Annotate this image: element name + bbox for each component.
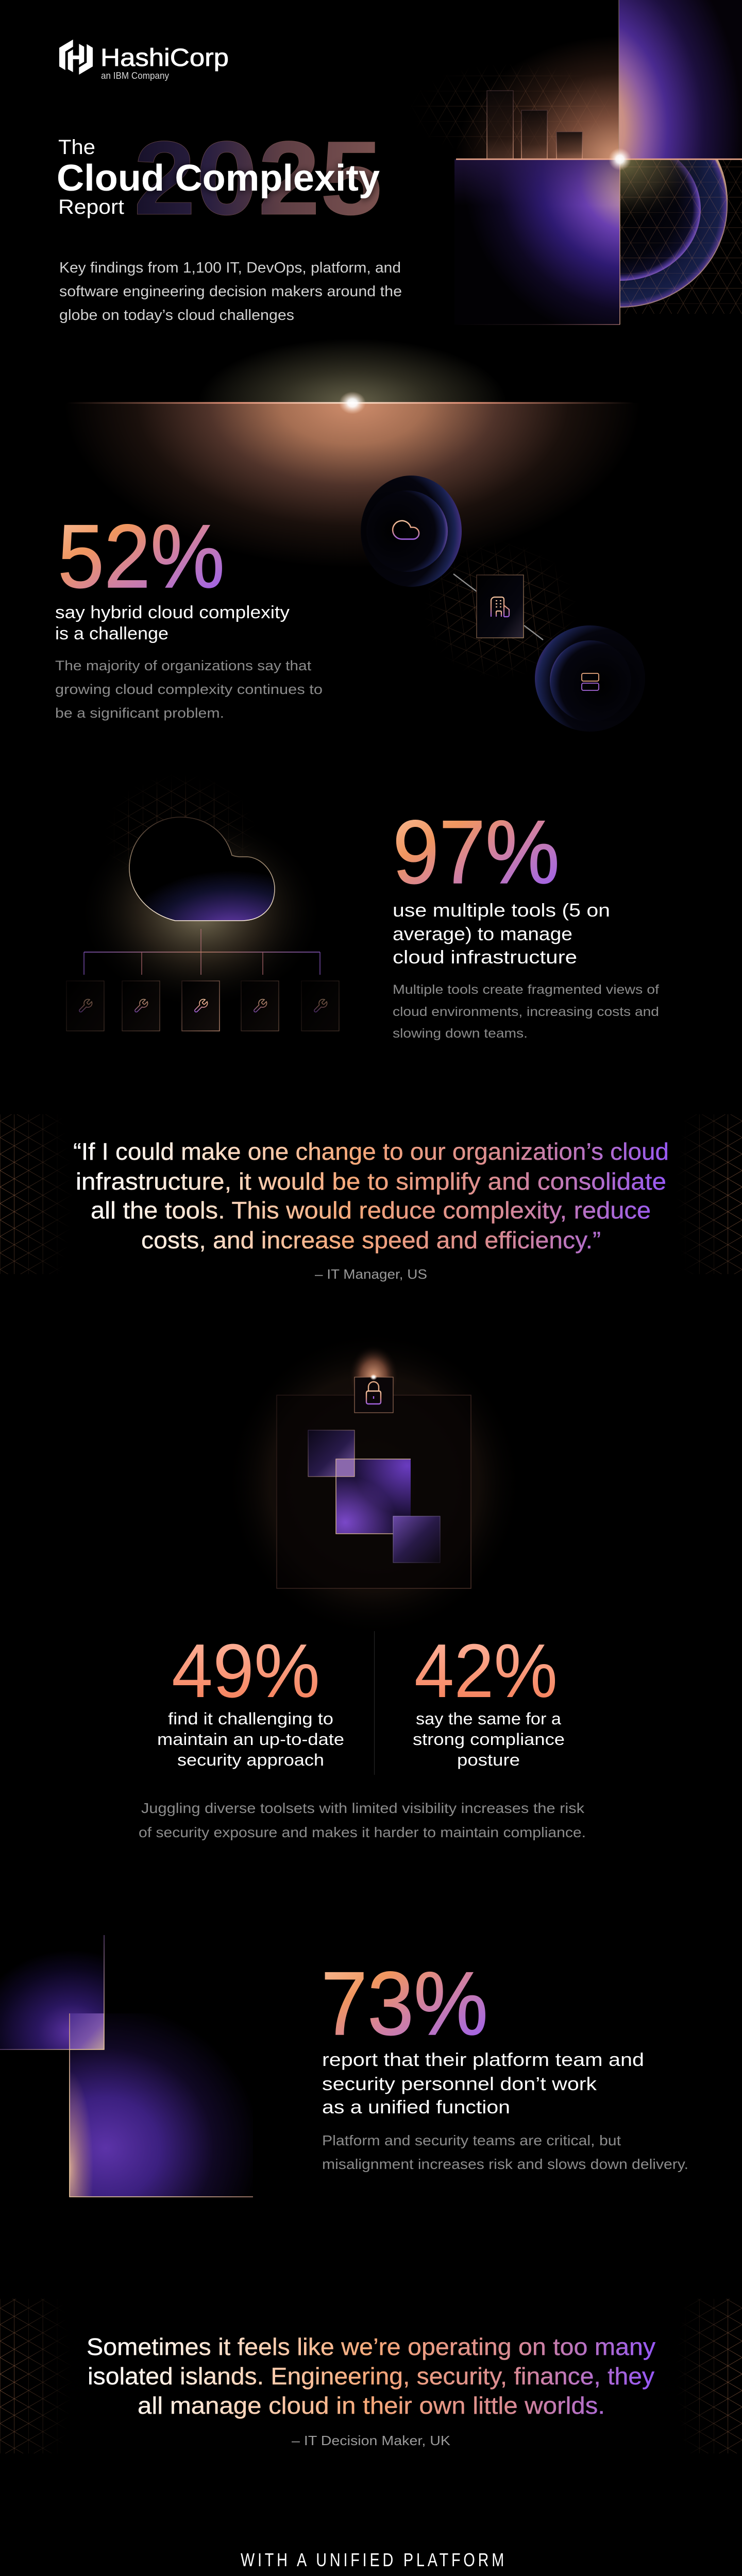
73 percent description: misalignment increases risk and slows down delivery. [322,2156,688,2172]
97 percent stat: 97% [393,802,560,903]
quote one [0,1114,742,1282]
hero intro text [59,260,402,324]
big cloud [129,817,275,921]
stat divider [374,1631,375,1775]
52 percent label: say hybrid cloud complexity [55,603,290,622]
hero graphic [407,0,742,325]
grid over arcs [620,159,742,314]
49 percent label [157,1709,344,1769]
hybrid diagram [361,476,645,732]
server node inner ring [550,640,631,722]
top panel edge line [618,0,619,159]
horizon star [339,392,366,414]
cloud node [361,476,462,587]
quote attribution: – IT Manager, US [315,1266,427,1282]
icon: building [491,597,509,617]
hero section [57,0,742,325]
49 percent label: security approach [177,1751,324,1769]
bar chart bars [487,91,582,159]
97 percent label: cloud infrastructure [393,946,577,968]
73 percent label: report that their platform team and [322,2049,644,2070]
52 percent description: The majority of organizations say that [55,658,312,673]
quote text: isolated islands. Engineering, security, finance, they [88,2363,654,2389]
building node [477,575,524,638]
73 percent label [322,2049,644,2117]
connector line bottom [524,625,543,640]
right arc outer [620,159,728,308]
52 percent description: be a significant problem. [55,705,224,721]
52 percent label [55,603,290,643]
quote attribution: – IT Decision Maker, UK [292,2433,451,2448]
overlap [70,2013,104,2049]
97 percent description: Multiple tools create fragmented views of [393,982,659,997]
quote grid right [675,2299,742,2453]
centre panel glow bottom left [336,1459,411,1534]
title line Cloud Complexity: Cloud Complexity [57,158,380,199]
quote text: all manage cloud in their own little worlds. [138,2392,605,2419]
quote text [87,2333,655,2419]
quote grid left [0,1114,72,1274]
73 percent label: security personnel don’t work [322,2073,597,2094]
tool card 2 [122,981,160,1031]
title line Report: Report [58,196,124,218]
server node outer ring [535,625,645,732]
square back [0,1935,104,2049]
tool card 3 [182,981,220,1031]
connector line top [453,574,477,591]
hero intro text: globe on today’s cloud challenges [59,307,294,324]
orange glow below line [64,403,641,568]
small panel top [308,1430,355,1477]
security section [139,1348,586,1840]
overlap top [336,1459,355,1477]
outer frame [277,1395,471,1588]
lower panel top tint [454,159,620,206]
lock card box [355,1377,393,1413]
97 percent description: slowing down teams. [393,1026,528,1041]
lock card [355,1374,393,1413]
year 2025: 2025 [133,120,382,237]
42 percent label: say the same for a [416,1709,561,1728]
tool card 5 [301,981,339,1031]
42 percent stat: 42% [414,1629,558,1714]
52 percent label: is a challenge [55,624,168,643]
cloud tools diagram [66,773,339,1031]
hero intro text: software engineering decision makers around the [59,283,402,300]
square front border [70,2013,253,2197]
cloud glow [77,814,325,1010]
olive glow under line [620,159,707,226]
quote text [73,1138,669,1253]
quote text: Sometimes it feels like we’re operating on too many [87,2333,655,2360]
52 percent description [55,658,323,721]
diagram grid [428,546,572,675]
right arc inner [620,159,701,281]
orange glow left of top panel [455,36,620,159]
73 percent description [322,2132,688,2172]
logo tagline: an IBM Company [101,71,169,81]
logo wordmark: HashiCorp [100,44,229,72]
connector wires [84,929,320,975]
quote text: infrastructure, it would be to simplify and consolidate [76,1168,666,1195]
tool card 4 [241,981,279,1031]
lock top glow [348,1345,399,1409]
49 percent label: maintain an up-to-date [157,1730,344,1749]
tool card 1 [66,981,104,1031]
73 percent label: as a unified function [322,2096,510,2117]
icon: server stack [582,673,599,690]
vertical edge line [619,159,620,325]
73 percent stat: 73% [321,1954,488,2054]
42 percent label: posture [457,1751,520,1769]
security description [139,1800,586,1840]
42 percent label [413,1709,565,1769]
97 percent description: cloud environments, increasing costs and [393,1005,659,1019]
97 percent description [393,982,659,1041]
cloud node outer ring [361,476,462,587]
overlapping squares graphic [0,1935,253,2197]
square front left glow [70,2071,93,2197]
server node [535,625,645,732]
title line The: The [58,136,95,159]
security description: of security exposure and makes it harder to maintain compliance. [139,1824,586,1840]
hero grid pattern [417,67,605,152]
small panel bottom [393,1516,440,1563]
olive glow above line [198,338,507,403]
quote grid right [675,1114,742,1274]
stat section 52 percent [55,338,645,732]
73 percent description: Platform and security teams are critical, but [322,2132,621,2148]
building card [477,575,524,638]
horizontal light line [456,159,742,160]
multiple tools section and first quote [0,778,742,1282]
centre panel border [336,1459,411,1534]
overlap corner border [70,2013,104,2049]
quote text: “If I could make one change to our organization’s cloud [73,1138,669,1165]
outer glow top left [0,2566,443,2576]
cloud node inner ring [366,490,448,572]
centre panel [336,1459,411,1534]
stat section 73 percent [0,1935,688,2197]
hero title [57,120,382,237]
quote text: costs, and increase speed and efficiency.” [141,1227,601,1253]
quote grid left [0,2299,72,2453]
97 percent label [393,900,610,968]
square front [70,2013,253,2197]
icon: cloud [393,521,419,539]
unified platform section [241,2549,504,2570]
stat section 97 percent [66,773,659,1041]
lower left purple panel [454,159,620,325]
quote text: all the tools. This would reduce complexity, reduce [91,1197,651,1224]
lock spark [370,1374,377,1380]
horizon glow [64,338,641,568]
security description: Juggling diverse toolsets with limited visibility increases the risk [141,1800,585,1816]
hero intro text: Key findings from 1,100 IT, DevOps, platform, and [59,260,401,276]
42 percent label: strong compliance [413,1730,565,1749]
halo [225,1329,524,1638]
hero and hybrid cloud sections [55,0,742,732]
logo mark [59,40,93,75]
platform and security alignment section with second quote [0,1935,742,2453]
square back border [0,1935,104,2049]
52 percent stat: 52% [58,506,225,607]
lower panel bottom edge [454,324,620,325]
diagram grid [110,778,250,870]
quote two [0,2299,742,2453]
security graphic [225,1329,524,1638]
star flare [609,148,631,171]
52 percent description: growing cloud complexity continues to [55,682,323,697]
section heading: WITH A UNIFIED PLATFORM [241,2549,504,2570]
97 percent label: average) to manage [393,923,572,944]
49 percent stat: 49% [172,1629,320,1714]
top right purple panel [619,0,742,159]
icon: padlock [366,1382,381,1404]
horizon line [67,402,634,404]
97 percent label: use multiple tools (5 on [393,900,610,921]
49 percent label: find it challenging to [168,1709,333,1728]
HashiCorp logo [59,40,229,81]
centre panel glow top right [336,1459,411,1534]
